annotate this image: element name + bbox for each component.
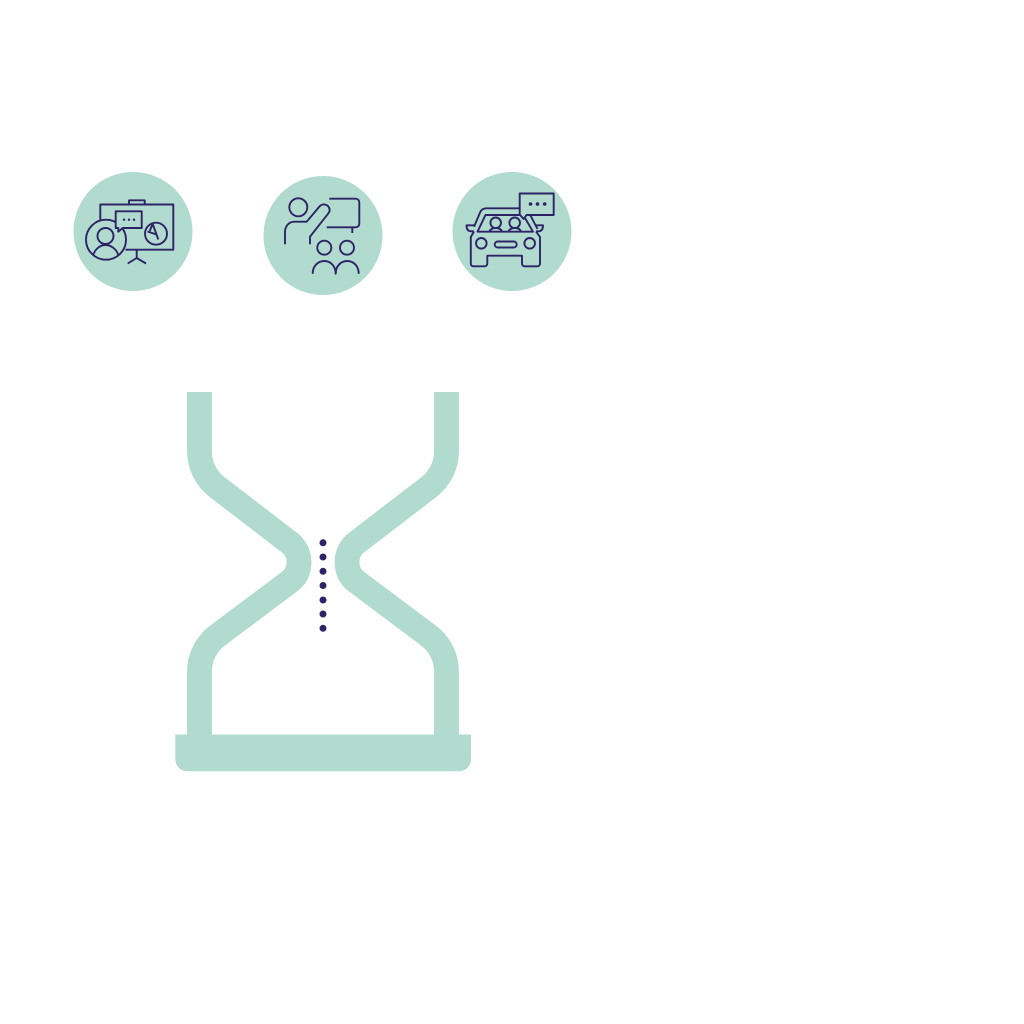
hourglass right wall (347, 392, 447, 745)
hourglass (175, 392, 471, 771)
icon: presentation board with person (74, 172, 192, 291)
icon: teacher at board with two students (264, 176, 382, 295)
icon: car with two passengers talking (452, 172, 572, 291)
hourglass left wall (199, 392, 299, 745)
hourglass base (175, 734, 471, 771)
falling sand dots (320, 539, 326, 632)
